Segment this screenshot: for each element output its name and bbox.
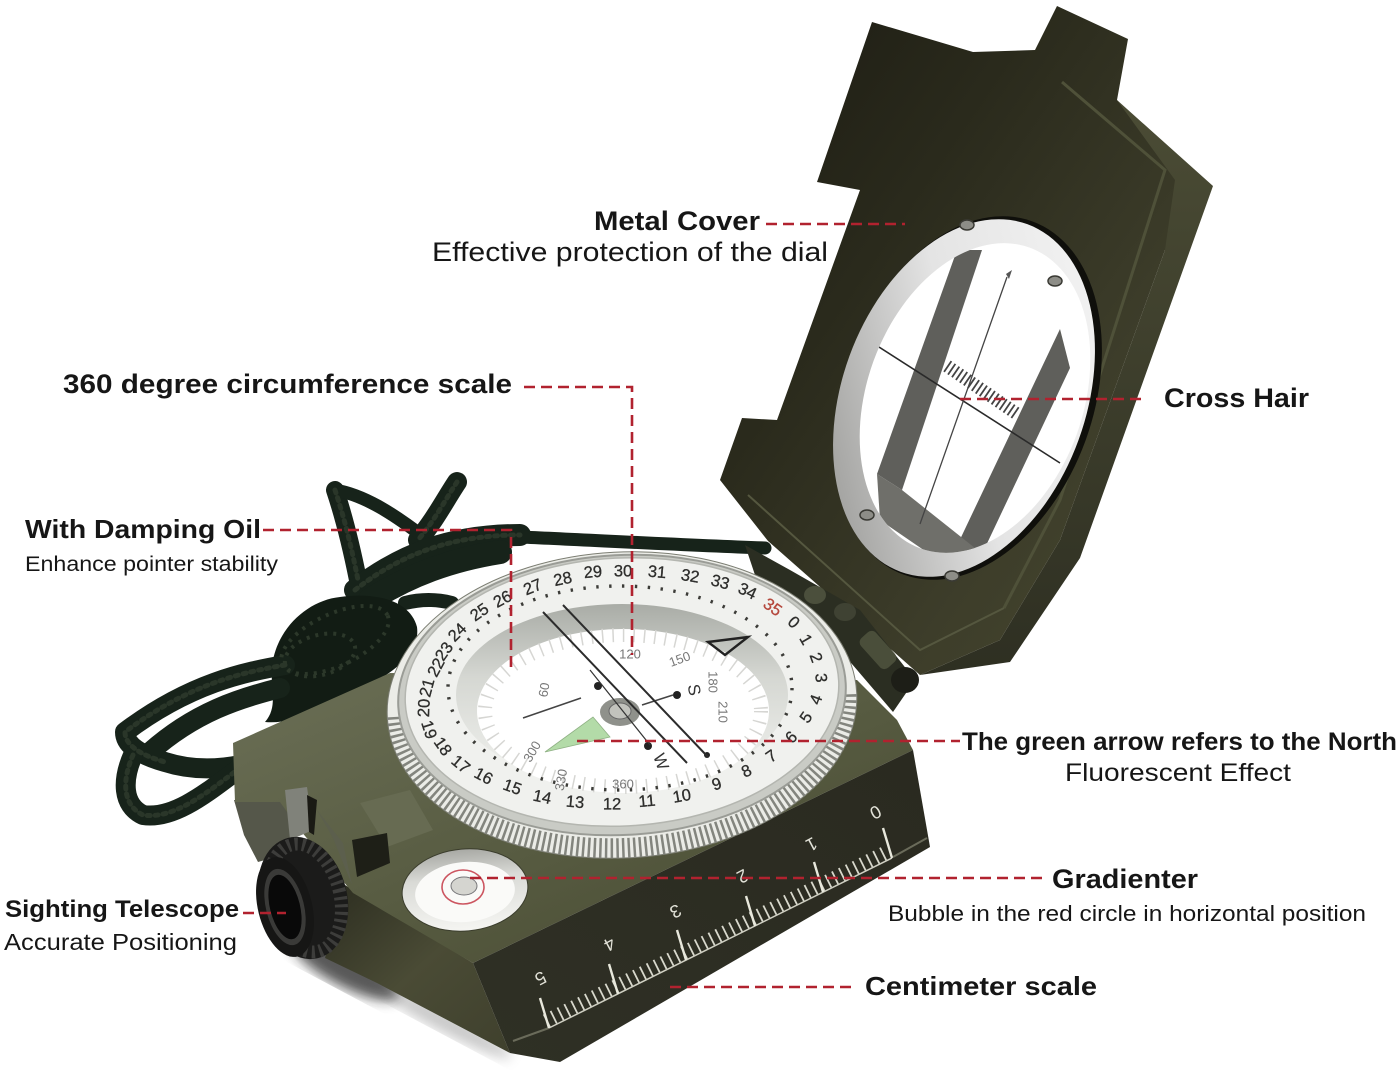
degree numbers: 13 bbox=[565, 793, 585, 812]
card markings bbox=[520, 646, 731, 792]
label: damping oil bbox=[25, 514, 279, 576]
leader: centimeter scale bbox=[670, 986, 856, 988]
degree numbers: 23 bbox=[432, 639, 457, 664]
sighting lines bbox=[543, 605, 708, 763]
degree numbers: 16 bbox=[471, 764, 496, 789]
label: damping oil: Enhance pointer stability bbox=[25, 553, 279, 576]
degree numbers: 5 bbox=[796, 709, 816, 727]
inner white card bbox=[477, 629, 769, 793]
degree numbers: 15 bbox=[501, 776, 524, 799]
degree numbers: 17 bbox=[448, 752, 473, 777]
degree numbers bbox=[415, 562, 830, 813]
front scale face bbox=[473, 750, 930, 1062]
ruler numbers: 3 bbox=[666, 900, 685, 922]
gradienter bubble level bbox=[399, 844, 531, 936]
degree numbers: 19 bbox=[417, 718, 440, 741]
cover inner face bbox=[720, 6, 1175, 675]
degree numbers: 20 bbox=[415, 698, 434, 717]
label: metal cover bbox=[432, 206, 828, 267]
ruler numbers: 1 bbox=[802, 833, 821, 855]
scale ticks bbox=[947, 366, 1017, 414]
ruler numbers: 2 bbox=[733, 865, 752, 887]
label: cross hair: Cross Hair bbox=[1164, 383, 1310, 413]
compass dial bbox=[379, 540, 865, 870]
sighting knob bbox=[245, 827, 361, 969]
degree numbers: 2 bbox=[806, 650, 826, 665]
card markings: W bbox=[649, 751, 673, 772]
label: sighting telescope: Accurate Positioning bbox=[4, 929, 237, 955]
compass body bbox=[233, 673, 930, 1066]
rear sight and telescope bbox=[245, 787, 433, 969]
front face highlight bbox=[513, 838, 927, 1041]
label: 360 degree scale: 360 degree circumference scale bbox=[63, 369, 512, 399]
degree numbers: 21 bbox=[416, 677, 438, 699]
degree numbers: 6 bbox=[782, 728, 801, 747]
degree numbers: 7 bbox=[763, 746, 781, 766]
card markings: 60 bbox=[535, 681, 553, 698]
degree numbers: 27 bbox=[521, 576, 545, 599]
card markings: S bbox=[684, 683, 704, 697]
leader: gradienter bbox=[470, 877, 1042, 879]
leader: telescope bbox=[243, 912, 286, 914]
card markings: 180 bbox=[706, 671, 721, 693]
cover outer side bbox=[920, 100, 1213, 675]
degree numbers: 12 bbox=[603, 795, 621, 813]
label: centimeter scale: Centimeter scale bbox=[865, 971, 1097, 1001]
degree numbers: 30 bbox=[614, 562, 632, 580]
lens window bbox=[860, 243, 1090, 553]
degree numbers: 34 bbox=[735, 579, 759, 603]
degree numbers: 11 bbox=[638, 792, 656, 811]
label: metal cover: Effective protection of the dial bbox=[432, 237, 828, 267]
card markings: 120 bbox=[619, 646, 641, 661]
leader: green arrow bbox=[577, 740, 960, 742]
label: damping oil: With Damping Oil bbox=[25, 514, 261, 544]
metal cover bbox=[720, 6, 1213, 675]
card markings: 330 bbox=[552, 768, 570, 792]
lens aperture bbox=[786, 179, 1150, 617]
degree numbers: 10 bbox=[671, 786, 692, 807]
top face bbox=[233, 673, 913, 963]
degree numbers: 24 bbox=[445, 620, 470, 645]
ruler numbers: 0 bbox=[866, 801, 885, 823]
degree numbers: 22 bbox=[424, 655, 449, 680]
leader: damping oil bbox=[263, 530, 511, 672]
cover rim highlight bbox=[1004, 82, 1165, 608]
card markings: 210 bbox=[716, 701, 731, 723]
ruler numbers: 4 bbox=[600, 933, 619, 955]
recess ring bbox=[456, 604, 788, 786]
crosshair wire bbox=[868, 340, 1060, 463]
label: sighting telescope: Sighting Telescope bbox=[5, 896, 239, 923]
silver ring bbox=[391, 543, 853, 847]
card markings: 150 bbox=[667, 648, 692, 670]
degree numbers: 31 bbox=[647, 563, 667, 582]
label: metal cover: Metal Cover bbox=[594, 206, 761, 236]
degree numbers: 8 bbox=[739, 761, 755, 782]
degree tick ring bbox=[448, 586, 792, 790]
card markings: 300 bbox=[520, 738, 544, 765]
degree numbers: 28 bbox=[552, 569, 574, 590]
degree numbers: 4 bbox=[806, 692, 826, 707]
degree numbers: 18 bbox=[430, 734, 455, 759]
degree numbers: 29 bbox=[583, 563, 603, 582]
degree numbers: 1 bbox=[795, 631, 816, 648]
degree numbers: 14 bbox=[531, 787, 553, 808]
label: gradienter bbox=[888, 864, 1366, 926]
degree numbers: 32 bbox=[680, 566, 701, 587]
knurled bezel bbox=[379, 540, 865, 870]
pivot bbox=[600, 698, 640, 726]
card markings: 360 bbox=[612, 776, 634, 791]
degree numbers: 26 bbox=[490, 587, 515, 612]
degree numbers: 9 bbox=[710, 774, 724, 794]
lower chamfer bbox=[325, 885, 510, 1053]
label: green arrow: Fluorescent Effect bbox=[1065, 759, 1291, 787]
label: gradienter: Bubble in the red circle in horizontal position bbox=[888, 901, 1366, 926]
black triangle marker bbox=[708, 637, 748, 655]
lanyard cord bbox=[125, 482, 765, 816]
lens screws bbox=[860, 220, 1062, 581]
leader: metal cover bbox=[766, 223, 905, 225]
degree numbers: 3 bbox=[811, 673, 830, 683]
sight bars bbox=[877, 250, 982, 490]
degree numbers: 0 bbox=[784, 613, 803, 632]
ruler numbers: 5 bbox=[531, 967, 550, 989]
degree numbers: 33 bbox=[709, 571, 731, 593]
ruler numbers bbox=[531, 801, 885, 989]
ground shadow bbox=[284, 924, 406, 1012]
label: green arrow: The green arrow refers to the North bbox=[962, 728, 1397, 756]
hinge knobs bbox=[745, 545, 919, 712]
green north arrow bbox=[545, 717, 610, 752]
leader: cross hair bbox=[960, 398, 1146, 400]
degree numbers: 35 bbox=[760, 595, 785, 620]
left gray strip bbox=[234, 800, 300, 862]
label: gradienter: Gradienter bbox=[1052, 864, 1199, 894]
ruler ticks bbox=[546, 851, 889, 1021]
label: green arrow bbox=[962, 728, 1397, 787]
label: sighting telescope bbox=[4, 896, 239, 955]
degree numbers: 25 bbox=[467, 600, 492, 625]
leader: 360 degree scale bbox=[524, 387, 632, 655]
silver lens ring bbox=[786, 182, 1142, 614]
